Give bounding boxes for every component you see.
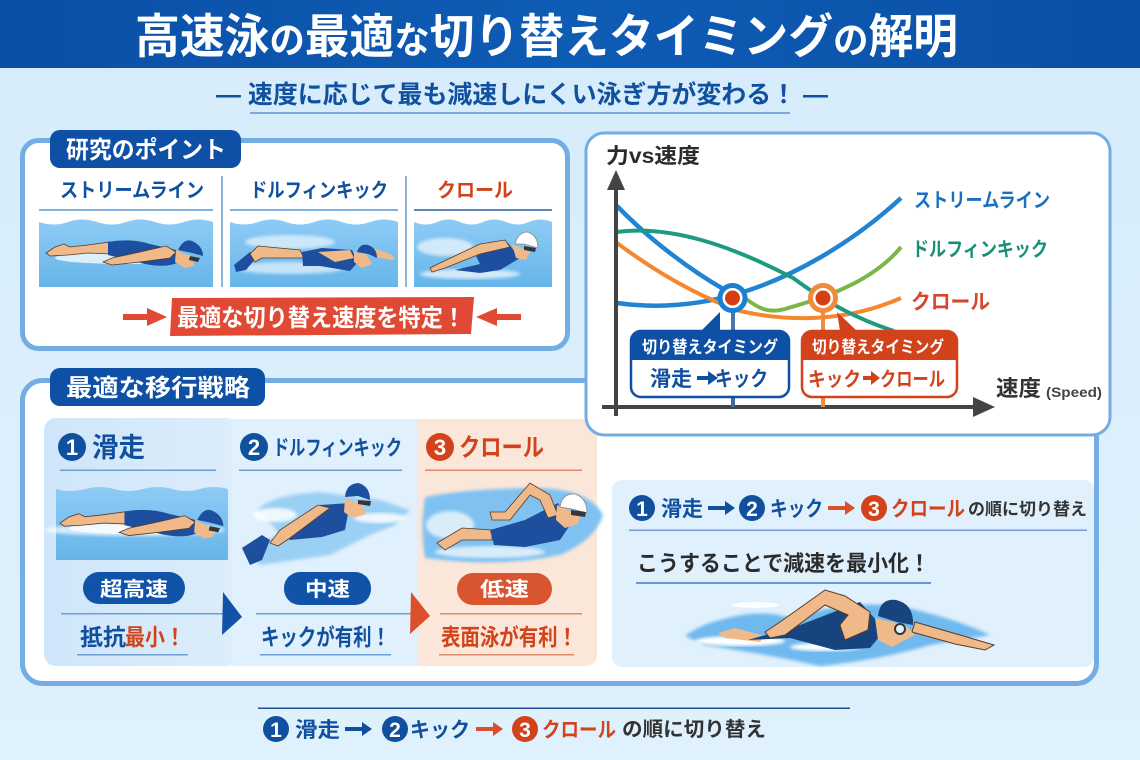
callout: kick to crawl: クロール (880, 368, 945, 391)
column: crawl: クロール (437, 179, 513, 202)
step 2: dolphin kick: 2 (248, 435, 260, 460)
step 3: crawl (422, 433, 603, 656)
curve: streamline rising (617, 198, 901, 306)
x axis label: (Speed) (1046, 384, 1102, 400)
bottom sequence: キック (410, 719, 470, 742)
callout: identify optimal speed: 最適な切り替え速度を特定！ (177, 305, 465, 332)
panel: optimal transition strategy (22, 368, 1096, 684)
arrow: right (476, 308, 521, 326)
step 2: dolphin kick: ドルフィンキック (273, 437, 402, 460)
callout: identify optimal speed (170, 297, 474, 336)
step 1: glide: 最小！ (125, 624, 185, 650)
axes (602, 170, 995, 417)
panel: research points (22, 130, 568, 348)
title banner: 高速泳の最適な切り替えタイミングの解明 (135, 10, 958, 63)
summary sequence: クロール (891, 498, 965, 521)
curve label: dolphin kick: ドルフィンキック (912, 238, 1048, 261)
x axis label: 速度 (996, 376, 1041, 401)
swimmer (437, 483, 587, 550)
column: crawl (414, 179, 552, 287)
callout: kick to crawl: 切り替えタイミング (812, 337, 944, 357)
heading: optimal transition strategy: 最適な移行戦略 (66, 375, 250, 402)
bottom sequence: 2 (389, 719, 401, 742)
x axis label (996, 376, 1102, 401)
column: streamline (39, 180, 213, 287)
chart title: 力vs速度 (606, 145, 700, 168)
bottom sequence: の順に切り替え (622, 718, 766, 741)
badge: medium speed: 中速 (305, 578, 350, 601)
callout: glide to kick: 切り替えタイミング (642, 337, 778, 357)
callout: kick to crawl (802, 312, 957, 397)
heading: research points: 研究のポイント (66, 137, 226, 164)
summary statement: こうすることで減速を最小化！ (637, 551, 930, 576)
swimmer: freestyle (685, 590, 994, 666)
subtitle: — 速度に応じて最も減速しにくい泳ぎ方が変わる！ — (216, 80, 828, 109)
step 1: glide (45, 433, 228, 656)
step 3: crawl: 表面泳が有利！ (441, 624, 577, 650)
step panels background (44, 418, 597, 666)
bottom sequence: 3 (519, 719, 531, 742)
step 1: glide: 抵抗 (80, 624, 126, 650)
column: dolphin kick: ドルフィンキック (250, 179, 388, 202)
step 2: dolphin kick: キックが有利！ (261, 624, 390, 650)
step 3: crawl: 3 (434, 435, 446, 460)
step 3: crawl: クロール (459, 434, 544, 462)
badge: super high speed (83, 572, 185, 604)
step 1: glide: 1 (66, 435, 78, 460)
switch marker: glide to kick (720, 286, 745, 407)
arrow: left (123, 308, 167, 326)
bottom sequence: 1 (270, 719, 282, 742)
bottom sequence: クロール (542, 719, 616, 742)
summary sequence: 滑走 (661, 498, 703, 521)
callout: glide to kick: 滑走 (650, 368, 692, 391)
summary sequence: 3 (868, 498, 880, 521)
water (243, 492, 410, 565)
heading: optimal transition strategy (50, 368, 265, 406)
curve: dolphin kick rising (745, 247, 901, 311)
badge: low speed: 低速 (480, 578, 529, 601)
summary sequence: の順に切り替え (968, 500, 1087, 519)
callout: glide to kick (631, 312, 789, 397)
curve: streamline descending (617, 206, 725, 290)
heading: research points (50, 130, 241, 168)
step 2: dolphin kick (239, 433, 411, 656)
summary sequence: 1 (636, 498, 648, 521)
summary box (612, 480, 1094, 667)
curve label: crawl: クロール (911, 291, 990, 314)
summary sequence (629, 495, 1087, 521)
badge: low speed (457, 573, 552, 605)
arrow: step 2 to 3 (410, 592, 430, 634)
swimmer (242, 483, 371, 565)
summary sequence: 2 (746, 498, 758, 521)
title banner (0, 0, 1140, 68)
badge: medium speed (284, 572, 371, 605)
column: dolphin kick (230, 179, 398, 287)
bottom sequence (258, 708, 850, 742)
arrow: step 1 to 2 (222, 592, 242, 635)
water (422, 488, 603, 562)
switch marker: kick to crawl (810, 286, 836, 407)
summary sequence: キック (770, 498, 823, 521)
bottom sequence: 滑走 (295, 719, 340, 742)
curve: crawl (617, 243, 901, 318)
column: streamline: ストリームライン (60, 180, 204, 202)
badge: super high speed: 超高速 (100, 578, 168, 601)
panel: force vs speed chart (586, 133, 1110, 435)
curve: dolphin kick descending (617, 231, 894, 331)
callout: kick to crawl: キック (808, 368, 861, 391)
callout: glide to kick: キック (715, 368, 768, 391)
step 1: glide: 滑走 (92, 433, 145, 463)
curve label: streamline: ストリームライン (914, 190, 1050, 212)
